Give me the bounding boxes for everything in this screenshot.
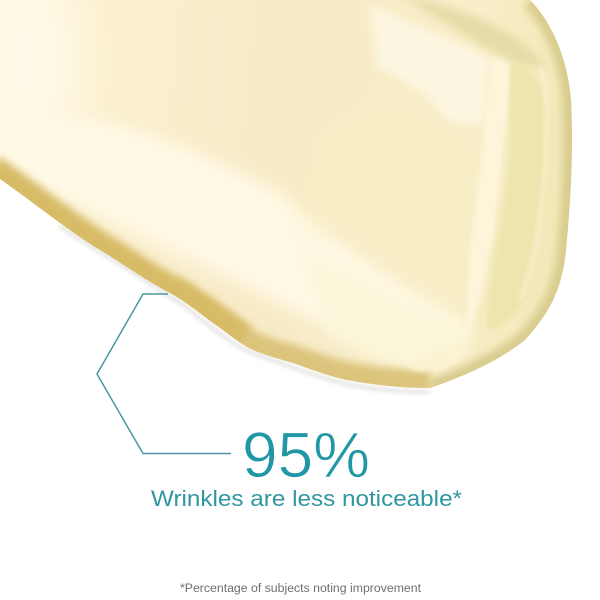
statistic: 95%: 95% xyxy=(242,419,370,491)
soft shadow under swatch xyxy=(60,226,430,392)
centre shading xyxy=(308,218,316,226)
lower right pale wash xyxy=(310,262,454,356)
inner vertical highlight xyxy=(466,56,510,327)
thin glossy line xyxy=(520,65,547,300)
bottom tip glare xyxy=(408,348,454,374)
footnote: *Percentage of subjects noting improvement xyxy=(180,583,422,595)
cream swatch xyxy=(0,0,572,395)
upper rim xyxy=(408,0,544,68)
lower-left pale band xyxy=(12,118,464,337)
bottom lobe tone xyxy=(170,293,430,388)
golden lower-left edge xyxy=(0,172,240,342)
statistic caption: Wrinkles are less noticeable* xyxy=(151,486,462,511)
top-left glow xyxy=(0,0,80,170)
top glare xyxy=(370,5,490,125)
right lobe xyxy=(486,62,550,330)
callout bracket line xyxy=(97,294,231,454)
right edge tone xyxy=(430,0,572,388)
